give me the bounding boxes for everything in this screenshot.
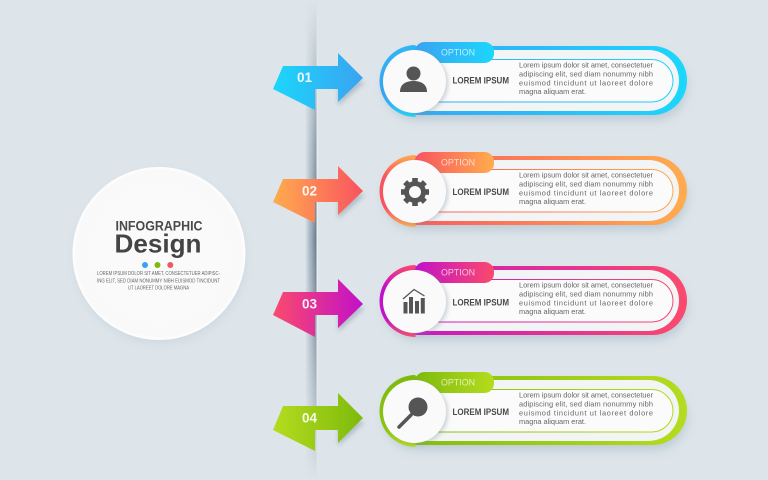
vertical timeline line (305, 0, 318, 480)
center title: infographic: INFOGRAPHIC (116, 218, 203, 234)
description: adipiscing elit, sed diam nonummy nibh (519, 70, 653, 78)
tab: option (415, 262, 494, 283)
description: magna aliquam erat. (519, 307, 586, 316)
description: euismod tincidunt ut laoreet dolore (519, 188, 653, 197)
number 04: 04 (302, 410, 318, 426)
central circle panel (72, 167, 246, 343)
icon: gear (401, 178, 429, 206)
arrow 01 (273, 53, 365, 110)
card 01 (380, 42, 687, 120)
description: adipiscing elit, sed diam nonummy nibh (519, 290, 653, 298)
arrow 03 (273, 279, 365, 337)
icon: magnifier (399, 398, 428, 427)
icon: person (400, 66, 427, 92)
description: magna aliquam erat. (519, 197, 586, 206)
center description: LOREM IPSUM DOLOR SIT AMET, CONSECTETUER ADIPISC- (97, 271, 220, 277)
heading: LOREM IPSUM (452, 187, 509, 198)
heading: LOREM IPSUM (452, 407, 509, 418)
tab: option (415, 42, 494, 63)
tab: option: OPTION (441, 268, 475, 278)
description: adipiscing elit, sed diam nonummy nibh (519, 180, 653, 188)
arrow 04 (273, 393, 365, 451)
card 02 (380, 152, 687, 230)
number 03: 03 (302, 296, 318, 312)
tab: option: OPTION (441, 48, 475, 58)
description: Lorem ipsum dolor sit amet, consectetuer (519, 60, 654, 70)
icon: bar chart (403, 290, 425, 314)
tab: option: OPTION (441, 158, 475, 168)
card 04 (380, 372, 687, 450)
description (519, 60, 654, 96)
tab: option: OPTION (441, 378, 475, 388)
description (519, 390, 654, 426)
description: euismod tincidunt ut laoreet dolore (519, 408, 653, 417)
arrow 02 (273, 166, 365, 223)
center description (97, 271, 220, 292)
tab: option (415, 152, 494, 173)
description: adipiscing elit, sed diam nonummy nibh (519, 400, 653, 408)
description (519, 280, 654, 316)
description: euismod tincidunt ut laoreet dolore (519, 298, 653, 307)
coloured dots (142, 262, 173, 268)
card 03 (380, 262, 687, 340)
heading: LOREM IPSUM (452, 76, 509, 86)
center title: design: Design (114, 228, 202, 258)
number 02: 02 (302, 184, 317, 198)
number 01: 01 (297, 70, 313, 85)
description: euismod tincidunt ut laoreet dolore (519, 78, 653, 87)
center description: ING ELIT, SED DIAM NONUMMY NIBH EUISMOD TINCIDUNT (97, 278, 220, 284)
description (519, 170, 654, 206)
description: magna aliquam erat. (519, 417, 586, 426)
center description: UT LAOREET DOLORE MAGNA (128, 286, 190, 292)
tab: option (415, 372, 494, 393)
description: Lorem ipsum dolor sit amet, consectetuer (519, 390, 654, 400)
description: Lorem ipsum dolor sit amet, consectetuer (519, 170, 654, 180)
description: Lorem ipsum dolor sit amet, consectetuer (519, 280, 654, 290)
description: magna aliquam erat. (519, 87, 586, 96)
heading: LOREM IPSUM (452, 298, 509, 308)
